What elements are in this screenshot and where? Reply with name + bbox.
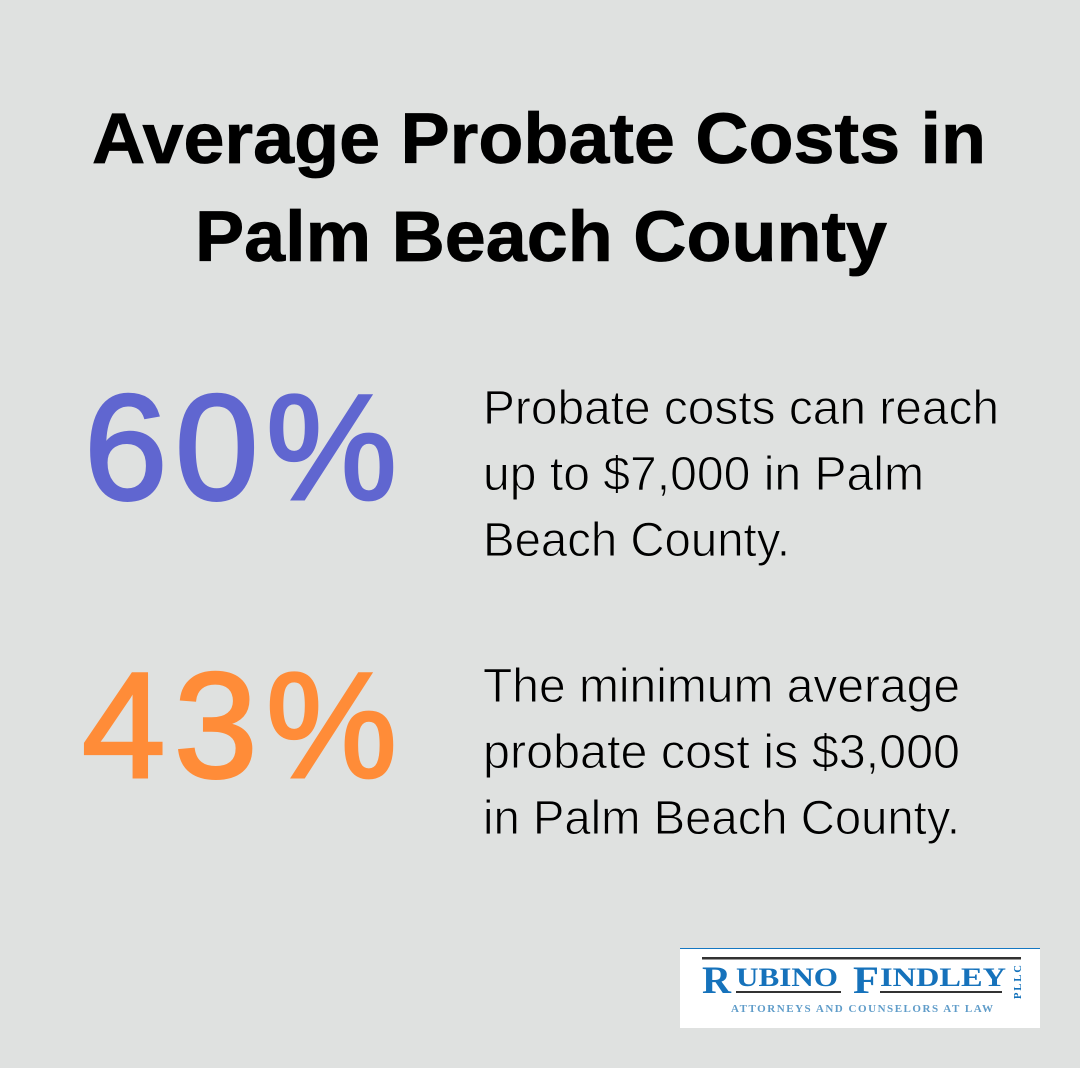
logo: Rubino Findley: R [702, 959, 732, 1002]
logo: Rubino Findley: F [853, 959, 879, 1002]
statistic: 43% [82, 641, 397, 809]
text block: minimum probate cost: The minimum average [483, 660, 960, 713]
logo: Rubino Findley: PLLC [1013, 965, 1024, 999]
text block: probate costs upper range: Probate costs can reach [483, 382, 999, 435]
text block: minimum probate cost: in Palm Beach County. [483, 792, 960, 845]
statistic: 60%: 60 [84, 363, 258, 531]
text block: probate costs upper range [483, 382, 999, 567]
text block: probate costs upper range: Beach County. [483, 514, 790, 567]
statistic: 43%: % [266, 641, 397, 809]
title [92, 100, 986, 277]
text block: probate costs upper range: up to $7,000 in Palm [483, 448, 924, 501]
text block: minimum probate cost: probate cost is $3,000 [483, 726, 960, 779]
title: Average Probate Costs in [92, 100, 986, 179]
statistic: 60% [84, 363, 397, 531]
statistic: 60%: % [266, 363, 397, 531]
text block: minimum probate cost [483, 660, 960, 845]
logo: Rubino Findley [680, 948, 1040, 1028]
logo: Rubino Findley: ATTORNEYS AND COUNSELORS AT LAW [731, 1003, 993, 1015]
logo: Rubino Findley: UBINO [736, 963, 838, 992]
logo: Rubino Findley: INDLEY [880, 963, 1006, 992]
statistic: 43%: 43 [82, 641, 257, 809]
title: Palm Beach County [195, 198, 888, 277]
